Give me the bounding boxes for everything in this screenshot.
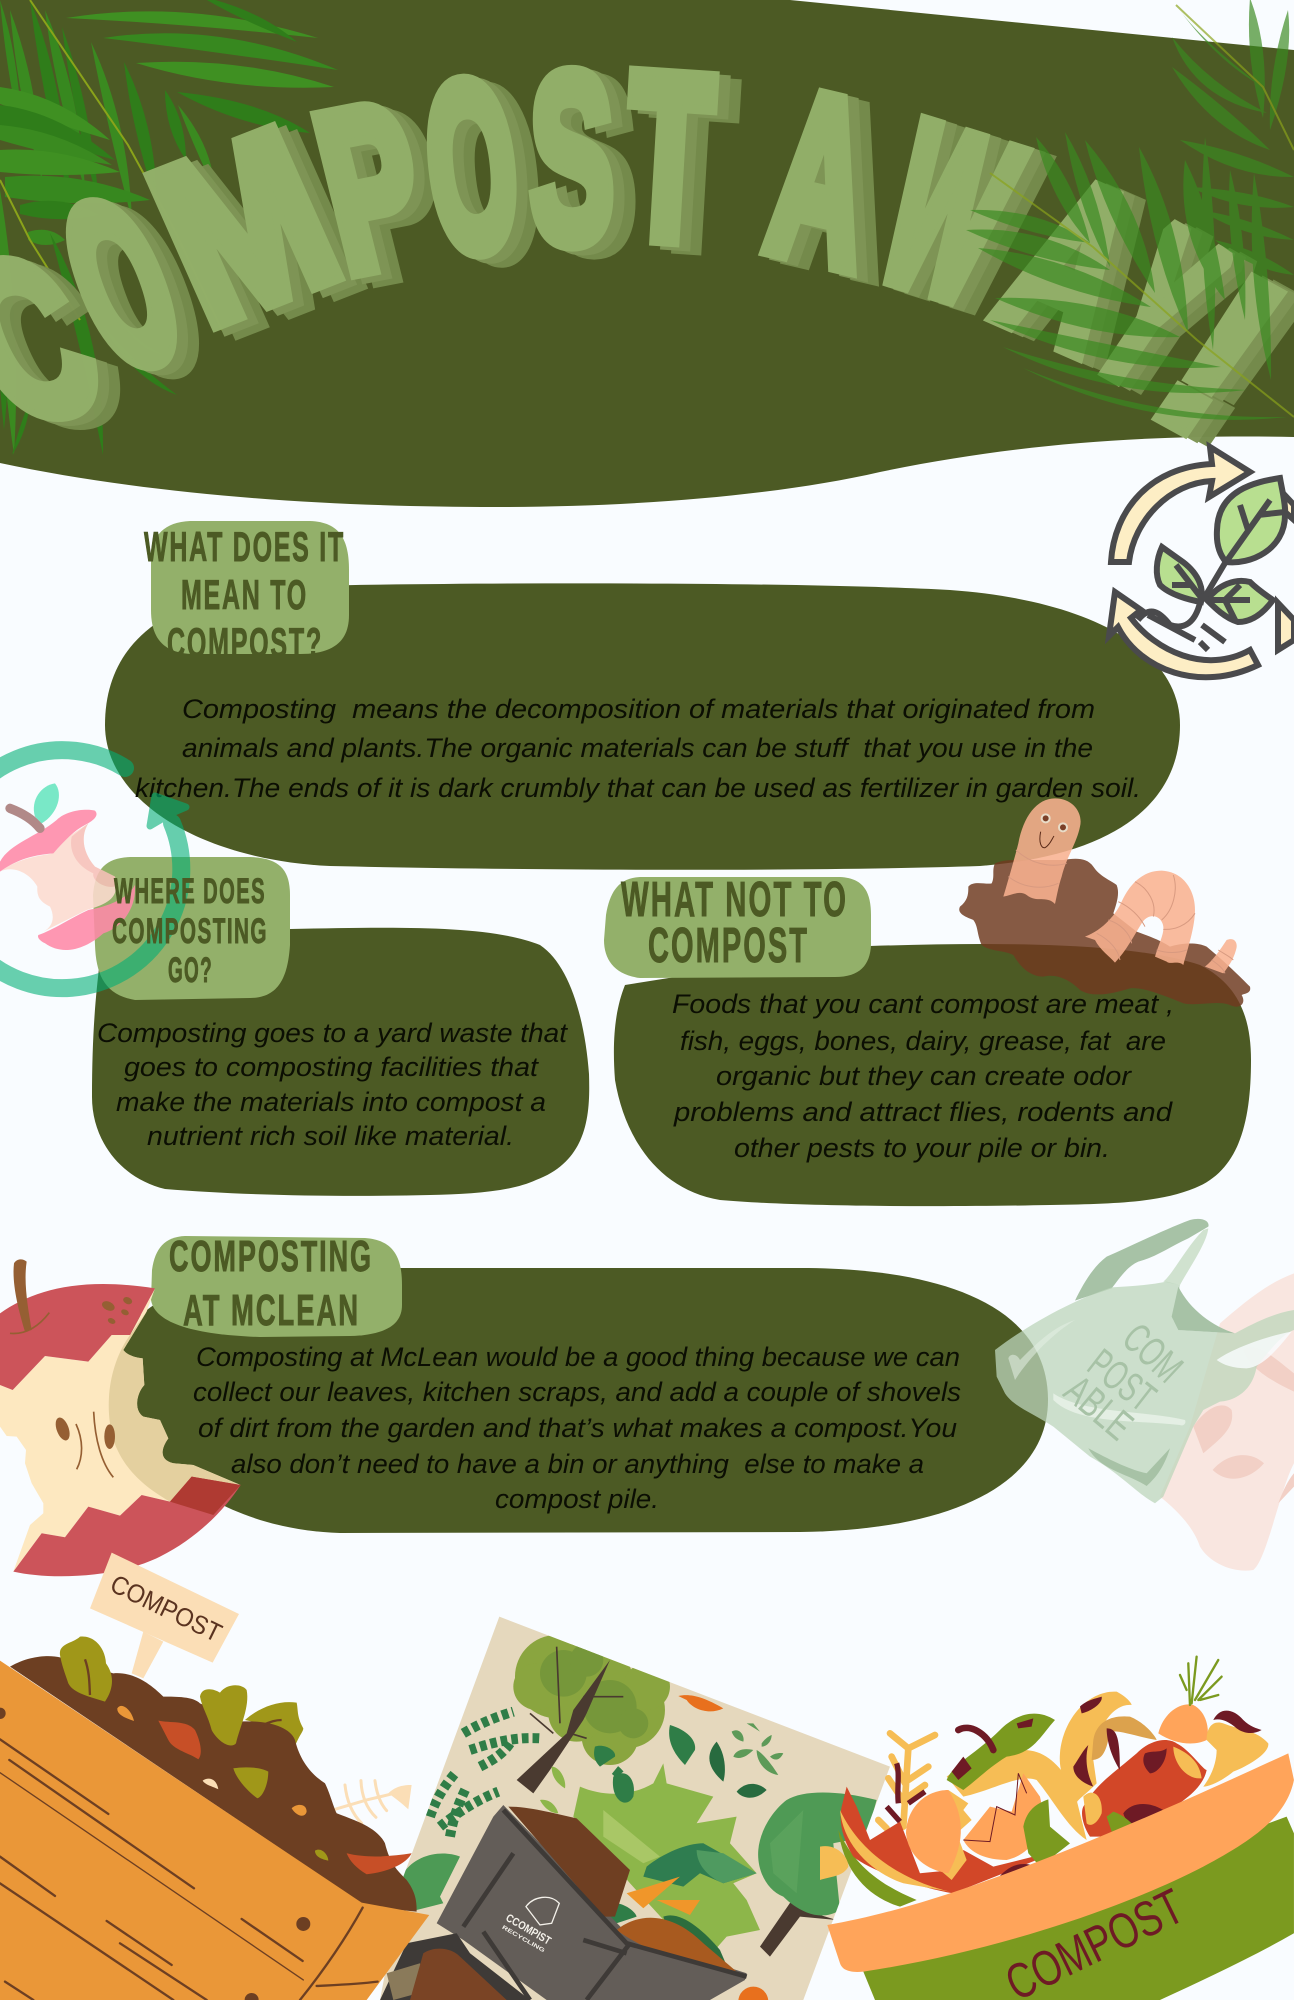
heading text: where does composting go: GO? (168, 951, 213, 990)
body text: Composting goes to a yard waste that (97, 1018, 569, 1048)
heading text: WHAT DOES IT (144, 523, 345, 570)
right palm fronds (966, 0, 1294, 420)
heading tab (604, 877, 871, 978)
ring arrow (0, 750, 186, 988)
icon: apple core with ring arrow (0, 750, 186, 988)
body text: fish, eggs, bones, dairy, grease, fat are (680, 1026, 1166, 1056)
title: COMPOST AWAY!: O (33, 156, 210, 411)
body text: make the materials into compost a (116, 1087, 546, 1117)
body text: Composting at McLean would be a good thing because we can (196, 1342, 960, 1372)
bowl rim (827, 1753, 1294, 1972)
heading tab (93, 857, 290, 1000)
green bag (995, 1219, 1294, 1503)
icon: worm in soil (959, 798, 1250, 1007)
illustration: wooden compost box (0, 1553, 429, 2000)
body text: animals and plants.The organic materials can be stuff that you use in the (182, 733, 1093, 763)
bag label: POST (1079, 1339, 1165, 1421)
heading text: AT MCLEAN (183, 1286, 360, 1335)
heading text: WHAT NOT TO (621, 873, 848, 927)
box nails (0, 1708, 310, 2000)
header band (0, 0, 1294, 507)
illustration: compost bin poster (370, 1617, 890, 2000)
body text: goes to composting facilities that (124, 1052, 540, 1082)
heading text (144, 532, 344, 654)
heading text (169, 1232, 373, 1335)
heading tab (151, 521, 349, 654)
bag label: COM (1114, 1314, 1192, 1391)
apple core (0, 783, 135, 950)
pink bag (1160, 1273, 1294, 1571)
heading text: COMPOST? (167, 619, 323, 666)
small soil tray (380, 1933, 530, 2000)
title: COMPOST AWAY!: Y (1055, 186, 1258, 431)
body text: collect our leaves, kitchen scraps, and add a couple of shovels (193, 1377, 961, 1407)
heading text: where does composting go (112, 872, 268, 990)
body text: compost pile. (495, 1484, 659, 1514)
bin logo: CCOMPIST (503, 1912, 553, 1948)
soil scraps (60, 1636, 412, 1874)
bin logo: RECYCLING (501, 1925, 546, 1955)
heading text (621, 873, 848, 973)
box lines (0, 1739, 378, 2000)
body text (97, 1018, 569, 1151)
heading tab (151, 1236, 402, 1337)
loose leaves (403, 1723, 783, 1910)
heading text: COMPOST (648, 919, 809, 973)
title: COMPOST AWAY!: W (853, 78, 1043, 350)
sign post (132, 1632, 163, 1678)
panel: composting at McLean (120, 1232, 1048, 1533)
panel shape (120, 1268, 1048, 1533)
poster artwork (380, 1635, 877, 2000)
body text (135, 694, 1141, 803)
icon: recycle plant (1109, 447, 1294, 677)
panel shape (614, 944, 1251, 1206)
bag label (1056, 1314, 1192, 1449)
tree right (758, 1792, 877, 1957)
bowl body (863, 1817, 1294, 2000)
panel: what does it mean to compost (105, 521, 1180, 870)
soil (10, 1656, 417, 1912)
body text: nutrient rich soil like material. (147, 1121, 514, 1151)
heading text: where does composting go: COMPOSTING (112, 912, 268, 951)
sign board: COMPOST (106, 1568, 227, 1648)
fish bones (335, 1781, 392, 1823)
icon: bitten red apple (0, 1259, 241, 1576)
title: COMPOST AWAY!: M (120, 82, 368, 373)
title: COMPOST AWAY!: S (529, 26, 614, 292)
title: COMPOST AWAY!: O (415, 33, 529, 301)
scraps (820, 1657, 1268, 1907)
panel shape (105, 583, 1180, 870)
back leaves (245, 1702, 303, 1747)
bag label: ABLE (1056, 1366, 1142, 1449)
heading text: where does composting go: WHERE DOES (114, 872, 266, 911)
icon: compostable bags (995, 1219, 1294, 1571)
heading text: MEAN TO (181, 571, 308, 618)
body text (672, 989, 1174, 1163)
body text: kitchen.The ends of it is dark crumbly that can be used as fertilizer in garden soil. (135, 773, 1141, 803)
poster background (370, 1617, 890, 2000)
panel: what not to compost (604, 873, 1251, 1206)
body text: Composting means the decomposition of materials that originated from (182, 694, 1095, 724)
body text: organic but they can create odor (716, 1061, 1132, 1091)
title: COMPOST AWAY!: P (296, 55, 447, 319)
panel: where does composting go (92, 857, 589, 1196)
orange peel (678, 1695, 723, 1711)
title: COMPOST AWAY!: A (756, 40, 885, 317)
panel shape (92, 928, 589, 1196)
sign board (90, 1553, 239, 1663)
body text: problems and attract flies, rodents and (673, 1097, 1173, 1127)
central leaves (573, 1763, 760, 1973)
heading text: COMPOSTING (169, 1232, 373, 1281)
left palm fronds (0, 0, 338, 455)
body text (193, 1342, 961, 1514)
bin logo (501, 1897, 559, 1955)
body text: of dirt from the garden and that’s what makes a compost.You (198, 1413, 957, 1443)
compost bin (437, 1805, 747, 2000)
illustration: compost bowl with scraps (820, 1657, 1294, 2000)
body text: also don’t need to have a bin or anything else to make a (231, 1449, 924, 1479)
tree left (513, 1635, 670, 1793)
title: COMPOST AWAY!: A (970, 130, 1173, 398)
body text: other pests to your pile or bin. (734, 1133, 1110, 1163)
body text: Foods that you cant compost are meat , (672, 989, 1174, 1019)
foliage sprays (430, 1712, 628, 1837)
title: COMPOST AWAY! (0, 25, 1294, 480)
pumpkin (738, 1987, 768, 2000)
box (0, 1661, 429, 2000)
title: COMPOST AWAY!: T (620, 25, 718, 290)
